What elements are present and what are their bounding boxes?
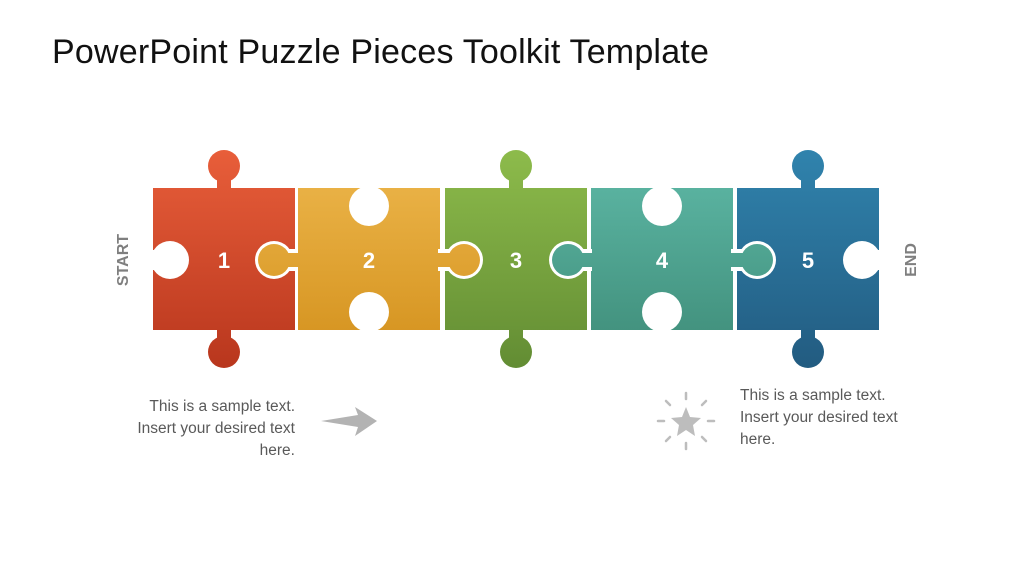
piece 5: [737, 150, 881, 368]
END label: END: [903, 243, 920, 277]
icon: star burst: [658, 393, 714, 449]
text block right: Insert your desired text: [740, 409, 898, 426]
icon: arrow: [321, 407, 377, 436]
piece 3: 3: [510, 248, 522, 273]
text block right: here.: [740, 431, 775, 448]
piece 4: 4: [656, 248, 669, 273]
piece 2: [255, 186, 483, 332]
piece 5: 5: [802, 248, 814, 273]
text block right: [740, 387, 898, 448]
text block left: This is a sample text.: [149, 398, 295, 415]
text block left: [137, 398, 295, 459]
text block left: here.: [260, 442, 295, 459]
piece 1: 1: [218, 248, 230, 273]
piece 3: [445, 150, 587, 368]
piece 2: 2: [363, 248, 375, 273]
START label: START: [115, 234, 132, 286]
text block left: Insert your desired text: [137, 420, 295, 437]
text block right: This is a sample text.: [740, 387, 886, 404]
piece 1: [151, 150, 295, 368]
piece 4: [549, 186, 776, 332]
title: PowerPoint Puzzle Pieces Toolkit Template: [52, 33, 709, 71]
